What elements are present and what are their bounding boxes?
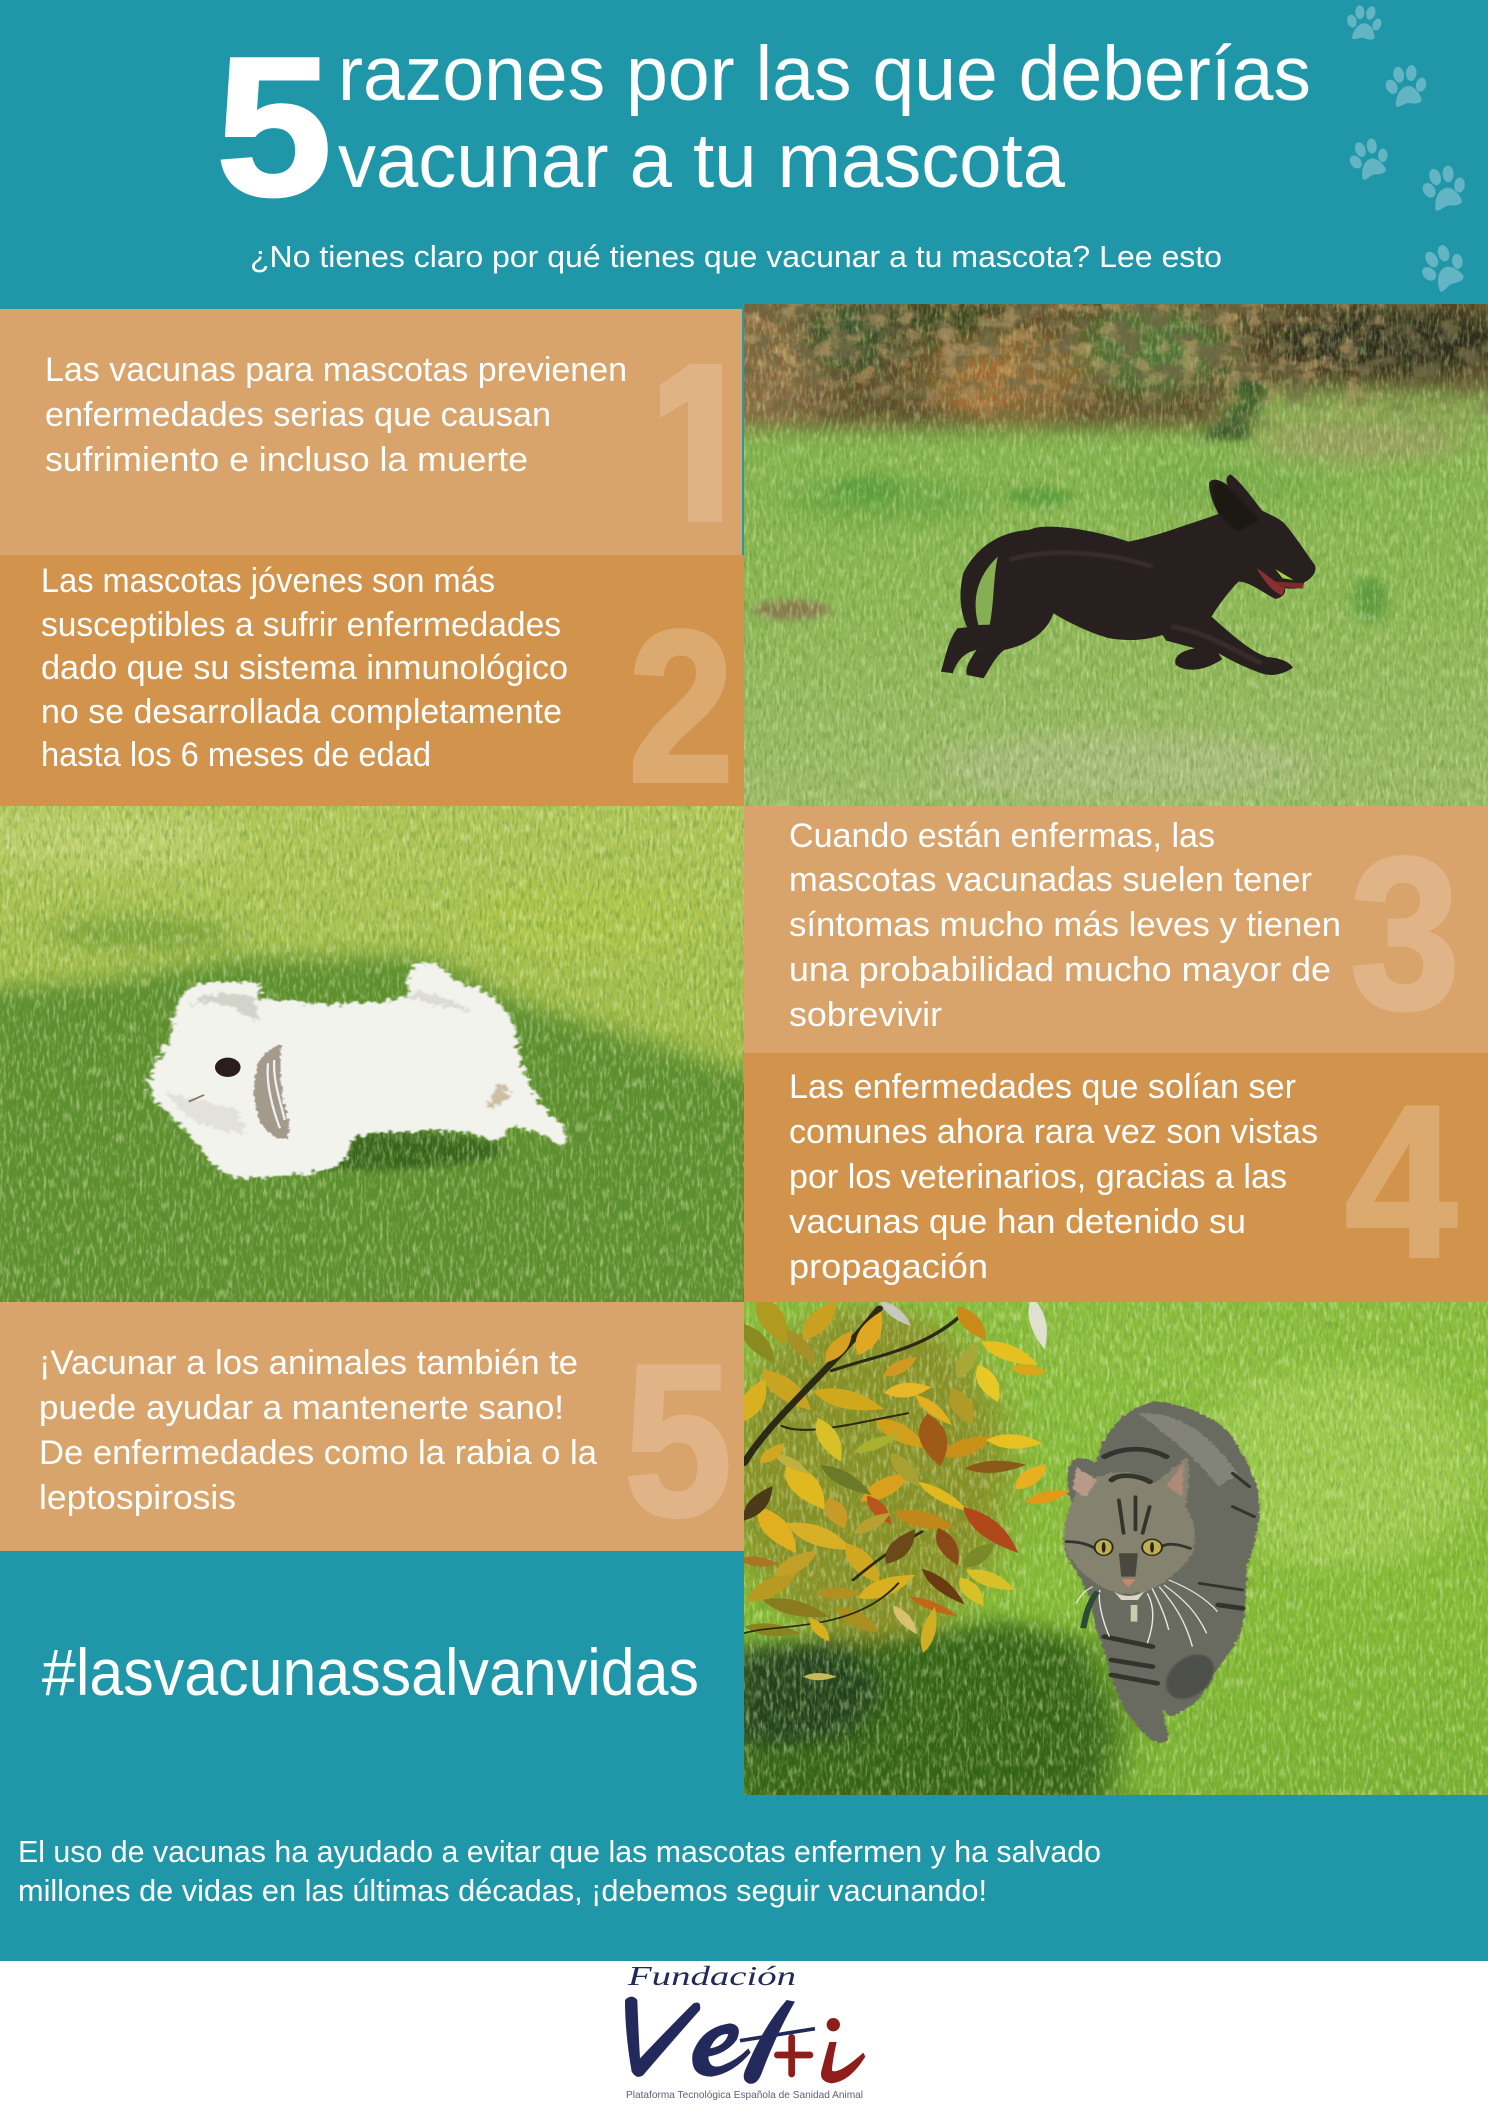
numeral 3: 3 [1350, 812, 1460, 1054]
title: razones por las que deberías [338, 31, 1311, 117]
text block: comunes ahora rara vez son vistas [789, 1113, 1318, 1151]
rabbit ear [254, 1045, 289, 1139]
panel: reason 5 [0, 1302, 744, 1561]
text block: propagación [789, 1248, 988, 1286]
text block: enfermedades serias que causan [45, 396, 551, 434]
cat collar [1083, 1592, 1098, 1628]
footer message band [0, 1795, 1488, 1961]
logo: tagline: Plataforma Tecnológica Española de Sanidad Animal [626, 2089, 863, 2101]
text block: leptospirosis [39, 1479, 236, 1517]
text block: Cuando están enfermas, las [789, 817, 1215, 855]
text block: susceptibles a sufrir enfermedades [41, 606, 561, 644]
header band [0, 0, 1488, 555]
text block: una probabilidad mucho mayor de [789, 951, 1331, 989]
text block: sobrevivir [789, 996, 942, 1034]
panel: reason 2 [0, 555, 744, 827]
footer message [18, 1834, 1101, 1908]
text block: por los veterinarios, gracias a las [789, 1158, 1287, 1196]
numeral 5: 5 [624, 1319, 732, 1561]
text block [41, 562, 568, 774]
photo: white rabbit [0, 806, 744, 1302]
rabbit [149, 963, 565, 1178]
numeral 2: 2 [628, 585, 734, 827]
big number 5: 5 [216, 16, 332, 237]
title: vacunar a tu mascota [338, 118, 1065, 204]
text block [789, 1068, 1318, 1286]
text block: sufrimiento e incluso la muerte [45, 441, 528, 479]
numeral 1: 1 [640, 326, 744, 568]
photo: running dog [706, 287, 1488, 806]
panel: reason 1 [0, 309, 744, 568]
text block: Las vacunas para mascotas previenen [45, 351, 627, 389]
logo: Fundación script: Fundación [627, 1961, 796, 1991]
footer message: El uso de vacunas ha ayudado a evitar que las mascotas enfermen y ha salvado [18, 1834, 1101, 1869]
text block: no se desarrollada completamente [41, 693, 562, 731]
numeral 4: 4 [1345, 1060, 1457, 1302]
text block: puede ayudar a mantenerte sano! [39, 1389, 564, 1427]
dog [941, 474, 1315, 678]
text block: vacunas que han detenido su [789, 1203, 1246, 1241]
text block [789, 817, 1341, 1034]
text block: ¡Vacunar a los animales también te [39, 1344, 578, 1382]
gap between tail and haunch [976, 557, 998, 625]
footer message: millones de vidas en las últimas décadas, ¡debemos seguir vacunando! [18, 1873, 987, 1908]
text block: Las enfermedades que solían ser [789, 1068, 1296, 1106]
text block [45, 351, 627, 479]
text block: De enfermedades como la rabia o la [39, 1434, 597, 1472]
subtitle: ¿No tienes claro por qué tienes que vacunar a tu mascota? Lee esto [250, 239, 1222, 274]
text block: hasta los 6 meses de edad [41, 736, 431, 774]
panel: reason 4 [744, 1053, 1488, 1302]
icon: paw prints [1341, 1, 1472, 297]
logo: Fundación Vet+i [625, 1961, 865, 2101]
photo: tabby cat [725, 1292, 1488, 1813]
text block: dado que su sistema inmunológico [41, 649, 568, 687]
logo: Vet+i letters [625, 1997, 865, 2084]
text block [39, 1344, 597, 1517]
hashtag: #lasvacunassalvanvidas [42, 1635, 699, 1709]
title [338, 31, 1311, 204]
cat [1064, 1402, 1260, 1743]
text block: síntomas mucho más leves y tienen [789, 906, 1341, 944]
rabbit eye [215, 1058, 241, 1077]
cat eyes [1095, 1539, 1162, 1555]
text block: mascotas vacunadas suelen tener [789, 861, 1312, 899]
bush with yellow leaves [731, 1292, 1260, 1743]
hashtag block [0, 1551, 744, 1795]
numeral 1 [660, 364, 722, 522]
panel: reason 3 [744, 806, 1488, 1054]
text block: Las mascotas jóvenes son más [41, 562, 495, 600]
